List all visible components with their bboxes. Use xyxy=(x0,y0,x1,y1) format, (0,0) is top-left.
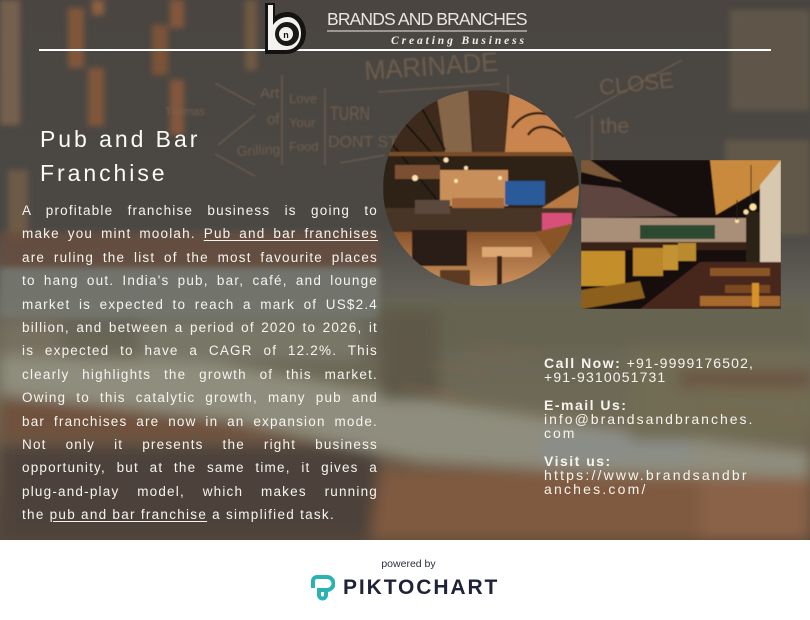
body text block: to hang out. India's pub, bar, café, and lounge xyxy=(22,273,378,288)
header divider line xyxy=(39,49,771,51)
panel: blurred restaurant background photo: Love xyxy=(289,91,317,106)
contact details: E-mail Us: xyxy=(544,397,627,413)
heading: Franchise xyxy=(40,160,168,186)
body text block: clearly highlights the growth of this market. xyxy=(22,367,378,382)
contact details: +91-9310051731 xyxy=(544,369,666,385)
panel: blurred restaurant background photo: Art xyxy=(260,85,280,102)
powered by label: powered by xyxy=(381,558,436,570)
panel: blurred restaurant background photo: Thomas xyxy=(165,106,205,118)
contact details: Visit us: xyxy=(544,453,612,469)
image: restaurant booth photo xyxy=(581,160,781,309)
body text block: Not only it presents the right business xyxy=(22,437,378,452)
panel: blurred restaurant background photo: TURN xyxy=(330,104,370,125)
body text block: is expected to have a CAGR of 12.2%. This xyxy=(22,343,378,358)
contact details: info@brandsandbranches. xyxy=(544,411,754,427)
body text block: the pub and bar franchise a simplified task. xyxy=(22,507,335,522)
body text block: plug-and-play model, which makes running xyxy=(22,484,378,499)
panel: blurred restaurant background photo: MARINADE xyxy=(363,47,499,86)
logo: Brands and Branches xyxy=(265,3,527,54)
contact details xyxy=(544,355,754,497)
body text block: market is expected to reach a mark of US$2.4 xyxy=(22,297,378,312)
logo tagline: Creating Business xyxy=(391,35,527,47)
panel: blurred restaurant background photo: of xyxy=(267,111,280,128)
panel: blurred restaurant background photo: Grilling xyxy=(236,141,281,159)
icon: b n monogram xyxy=(265,3,306,54)
contact details: com xyxy=(544,425,576,441)
body text block: bar franchises are now in an expansion mode. xyxy=(22,414,378,429)
body text block: are ruling the list of the most favourite places xyxy=(22,250,378,265)
Piktochart wordmark: PIKTOCHART xyxy=(343,576,499,599)
contact details: https://www.brandsandbr xyxy=(544,467,749,483)
panel: blurred restaurant background photo: Food xyxy=(289,139,319,154)
body text block: make you mint moolah. Pub and bar franchises xyxy=(22,226,378,241)
panel: blurred restaurant background photo: DONT ST xyxy=(328,134,398,151)
panel: blurred restaurant background photo: CLOSE xyxy=(598,67,675,100)
heading: Pub and Bar xyxy=(40,126,200,152)
image: circular bar interior photo xyxy=(383,90,579,288)
panel: blurred restaurant background photo: the xyxy=(600,115,629,138)
contact details: anches.com/ xyxy=(544,481,648,497)
heading xyxy=(40,126,200,186)
body text block: Owing to this catalytic growth, many pub and xyxy=(22,390,378,405)
body text block: opportunity, but at the same time, it gives a xyxy=(22,460,378,475)
icon: b n monogram: n xyxy=(283,30,289,40)
panel: blurred restaurant background photo: Your xyxy=(289,115,316,130)
icon: Piktochart logo mark xyxy=(311,575,335,600)
body text block: billion, and between a period of 2020 to 2026, it xyxy=(22,320,378,335)
logo wordmark: BRANDS AND BRANCHES xyxy=(327,9,527,29)
footer: powered by Piktochart xyxy=(0,540,810,620)
body text block xyxy=(22,203,378,522)
contact details: Call Now: +91-9999176502, xyxy=(544,355,754,371)
body text block: A profitable franchise business is going to xyxy=(22,203,378,218)
logo rule xyxy=(327,30,527,32)
